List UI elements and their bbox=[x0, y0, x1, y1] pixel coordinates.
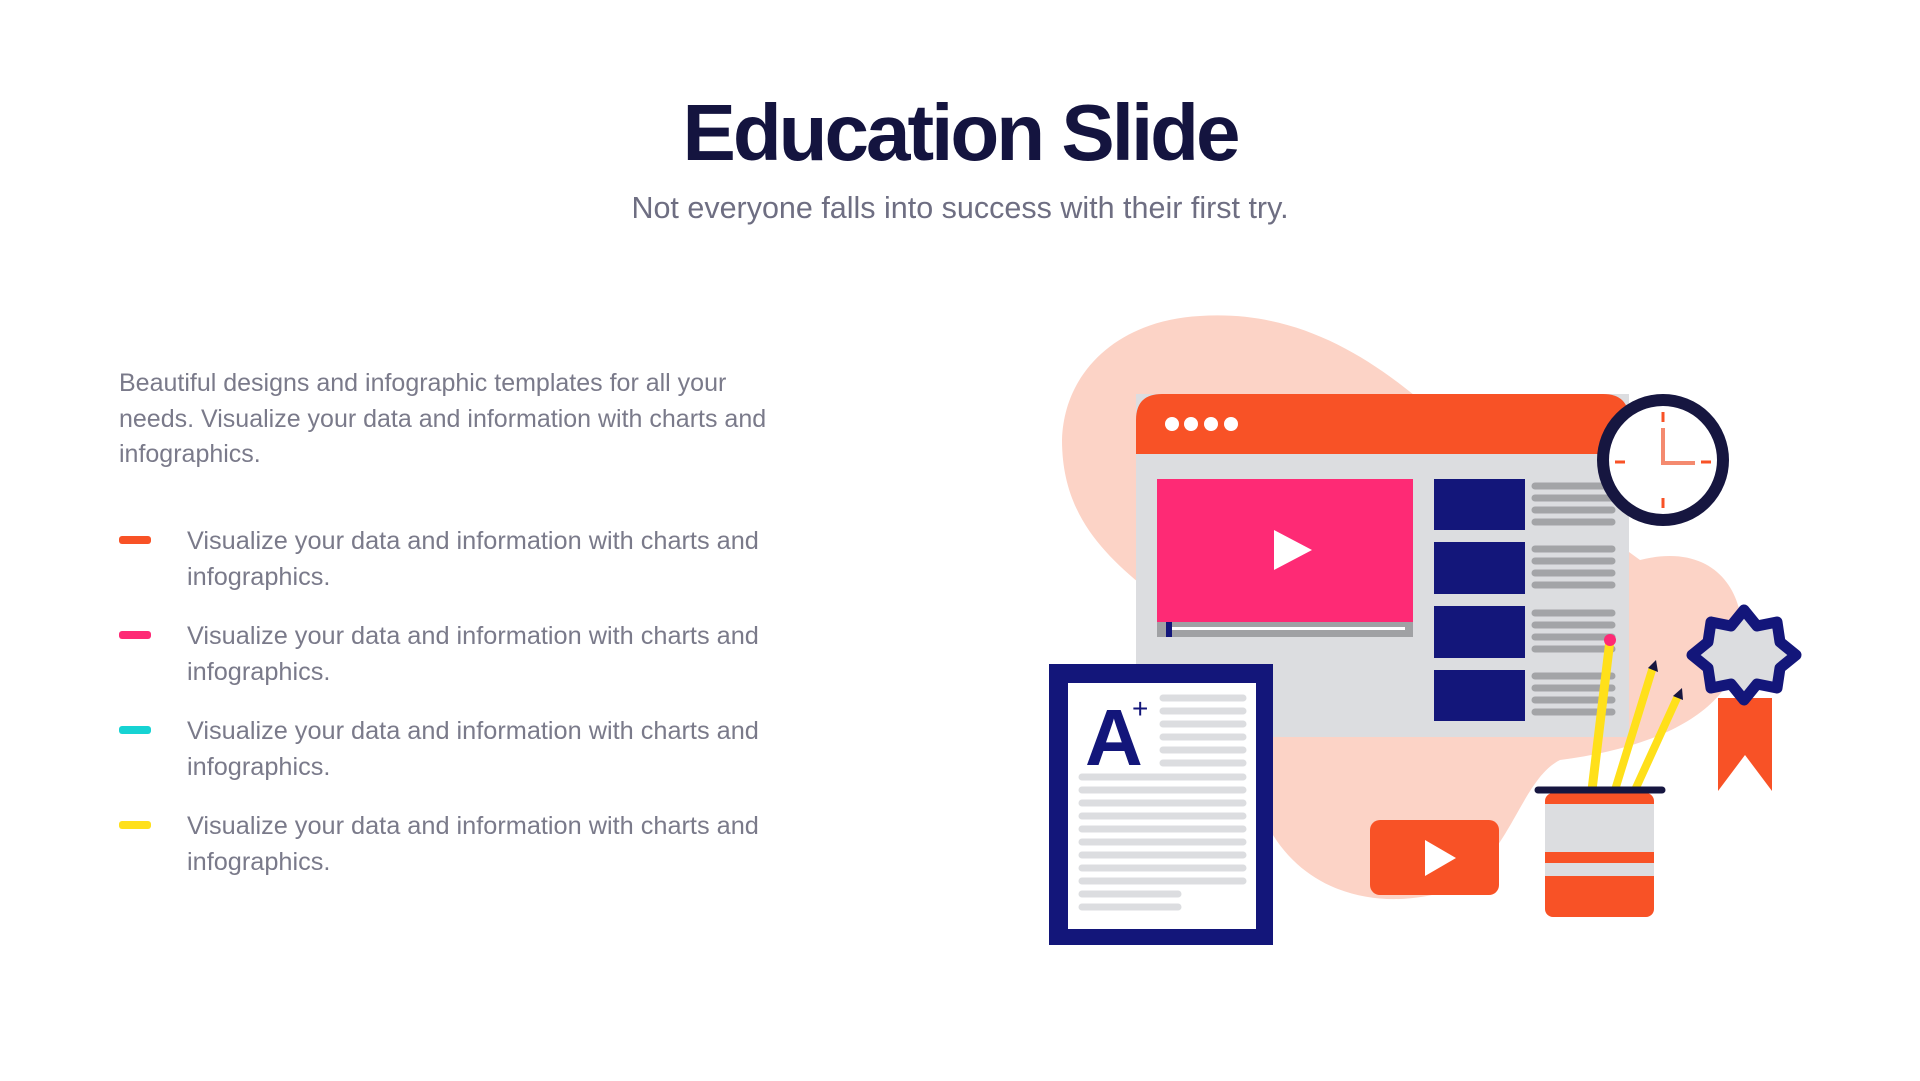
bullet 3: Visualize your data and information with charts and infographics. bbox=[187, 717, 759, 780]
subtitle: Not everyone falls into success with their first try. bbox=[631, 191, 1289, 225]
A+ document: A bbox=[1085, 693, 1143, 782]
title: Education Slide bbox=[682, 88, 1238, 177]
pencil cup bbox=[1538, 634, 1683, 917]
intro paragraph: needs. Visualize your data and information with charts and bbox=[119, 404, 766, 432]
intro paragraph: infographics. bbox=[119, 440, 261, 468]
small play button bbox=[1370, 820, 1499, 895]
intro paragraph bbox=[119, 369, 766, 468]
intro paragraph: Beautiful designs and infographic templates for all your bbox=[119, 369, 726, 397]
thumbnails bbox=[1434, 479, 1525, 530]
browser window bbox=[1136, 394, 1629, 737]
A+ document bbox=[1049, 664, 1273, 945]
bullet 4: Visualize your data and information with charts and infographics. bbox=[187, 812, 759, 876]
bullet 2: Visualize your data and information with charts and infographics. bbox=[187, 622, 759, 686]
video player bbox=[1157, 479, 1413, 622]
medal bbox=[1692, 610, 1796, 791]
A+ document: + bbox=[1132, 693, 1148, 724]
bullet 1: Visualize your data and information with charts and infographics. bbox=[187, 527, 759, 590]
clock bbox=[1603, 400, 1723, 520]
blob background bbox=[1062, 315, 1742, 899]
